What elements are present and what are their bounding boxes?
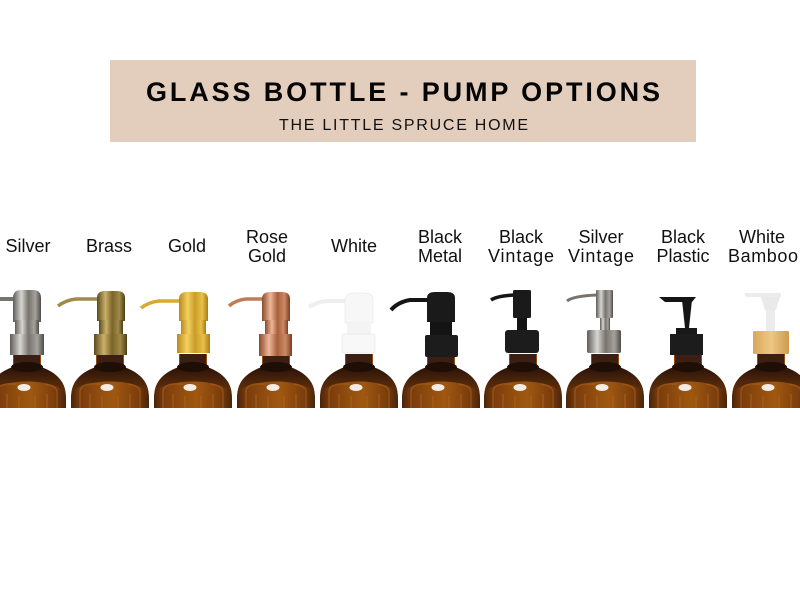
pump option: Brass — [58, 236, 149, 408]
label: Black Vintage: Black — [499, 227, 544, 247]
pump option: Black Plastic: Plastic — [656, 246, 710, 266]
pump option: Gold — [141, 236, 232, 408]
pump option: White — [309, 236, 398, 408]
label: Black Plastic: Black — [661, 227, 706, 247]
pump option: Black Vintage: Vintage — [488, 246, 554, 266]
pump option: Black Plastic — [649, 227, 727, 408]
pump option: Black Metal — [391, 227, 480, 408]
pump option: Silver — [0, 236, 66, 408]
label: Silver Vintage: Silver — [578, 227, 624, 247]
pump option: Silver Vintage — [566, 227, 644, 408]
pump option: Black Metal: Metal — [418, 246, 462, 266]
pump option: Black Vintage — [484, 227, 562, 408]
pump option: White Bamboo: Bamboo — [728, 246, 798, 266]
subheading: THE LITTLE SPRUCE HOME — [279, 117, 528, 134]
label: White Bamboo: White — [739, 227, 785, 247]
pump option: Rose Gold — [229, 227, 315, 408]
label: Gold: Gold — [168, 236, 206, 256]
label: White: White — [331, 236, 377, 256]
heading: GLASS BOTTLE - PUMP OPTIONS — [146, 77, 660, 107]
label: Rose Gold: Rose — [246, 227, 288, 247]
pump option: Rose Gold: Gold — [248, 246, 286, 266]
label: Black Metal: Black — [418, 227, 463, 247]
pump option: White Bamboo — [728, 227, 800, 408]
label: Brass: Brass — [86, 236, 132, 256]
infographic — [0, 60, 800, 408]
label: Silver: Silver — [5, 236, 51, 256]
pump option: Silver Vintage: Vintage — [568, 246, 634, 266]
title banner — [110, 60, 696, 142]
